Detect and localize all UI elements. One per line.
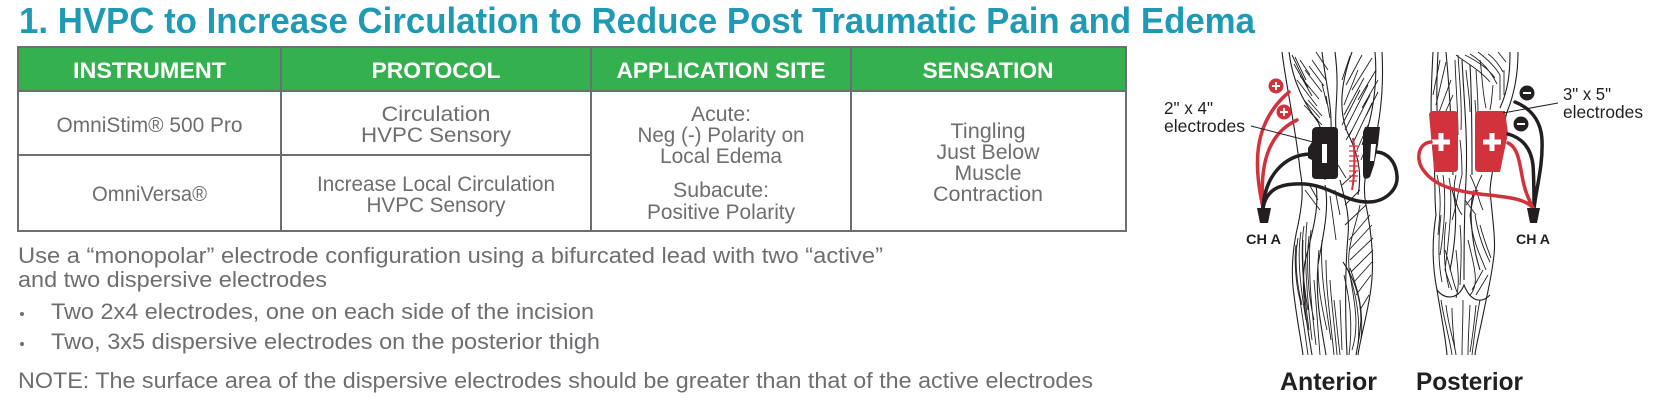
cell: OmniStim: OmniStim® 500 Pro <box>56 113 243 137</box>
table header band <box>18 47 1126 91</box>
cell: sensation: Just Below <box>936 140 1040 164</box>
cell: protocol one: Circulation <box>382 102 490 126</box>
anterior lead wires <box>1257 92 1397 208</box>
cell: protocol two: HVPC Sensory <box>366 193 506 217</box>
cell: protocol two: Increase Local Circulation <box>317 172 555 196</box>
cell: application site: Positive Polarity <box>647 200 795 224</box>
cell: application site: Local Edema <box>660 144 782 168</box>
cell: application site: Neg (-) Polarity on <box>638 123 804 147</box>
cell: protocol one: HVPC Sensory <box>361 123 511 147</box>
anatomical illustration: posterior leg <box>1431 52 1518 355</box>
posterior channel label: CH A <box>1516 232 1550 247</box>
posterior electrode callout: electrodes <box>1563 102 1643 122</box>
anterior positive markers <box>1268 78 1292 120</box>
posterior electrode callout <box>1503 84 1643 122</box>
anterior electrode callout: 2" x 4" <box>1164 98 1213 118</box>
cell: sensation: Contraction <box>933 182 1043 206</box>
header: sensation: SENSATION <box>922 58 1054 83</box>
posterior electrode pads <box>1429 111 1508 172</box>
cell: OmniVersa: OmniVersa® <box>92 182 207 206</box>
cell: application site <box>638 102 804 224</box>
title: 1. HVPC to Increase Circulation to Reduce Post Traumatic Pain and Edema <box>19 0 1256 41</box>
anterior electrode callout: electrodes <box>1164 116 1245 136</box>
cell: application site: Subacute: <box>673 178 769 202</box>
anterior channel label: CH A <box>1246 232 1281 247</box>
posterior negative markers <box>1514 86 1534 132</box>
header: application site: APPLICATION SITE <box>616 58 826 83</box>
incision with stitches <box>1349 138 1359 190</box>
posterior caption: Posterior <box>1416 368 1523 396</box>
cell: sensation <box>933 119 1043 206</box>
posterior electrode callout: 3" x 5" <box>1563 84 1611 104</box>
anterior electrode pads <box>1308 127 1380 179</box>
anterior electrode callout <box>1164 98 1313 142</box>
cell: protocol one <box>361 102 511 147</box>
posterior lead wires <box>1419 102 1542 208</box>
bullet list: Two, 3x5 dispersive electrodes on the posterior thigh <box>51 329 600 354</box>
posterior connector <box>1527 208 1540 223</box>
cell: sensation: Muscle <box>954 161 1022 185</box>
cell: sensation: Tingling <box>950 119 1026 143</box>
note: NOTE: The surface area of the dispersive electrodes should be greater than that of the active electrodes <box>18 368 1093 393</box>
header: protocol: PROTOCOL <box>372 58 501 83</box>
anterior connector <box>1257 208 1271 223</box>
anterior caption: Anterior <box>1280 368 1377 396</box>
cell: protocol two <box>317 172 555 217</box>
header: instrument: INSTRUMENT <box>73 58 226 83</box>
table <box>18 47 1126 231</box>
intro text <box>18 243 883 292</box>
cell: application site: Acute: <box>691 102 751 126</box>
bullet list <box>20 299 600 354</box>
intro text: Use a “monopolar” electrode configuration using a bifurcated lead with two “active” <box>18 243 883 268</box>
intro text: and two dispersive electrodes <box>18 267 327 292</box>
bullet list: Two 2x4 electrodes, one on each side of the incision <box>51 299 594 324</box>
anatomical illustration: anterior leg <box>1282 52 1383 355</box>
